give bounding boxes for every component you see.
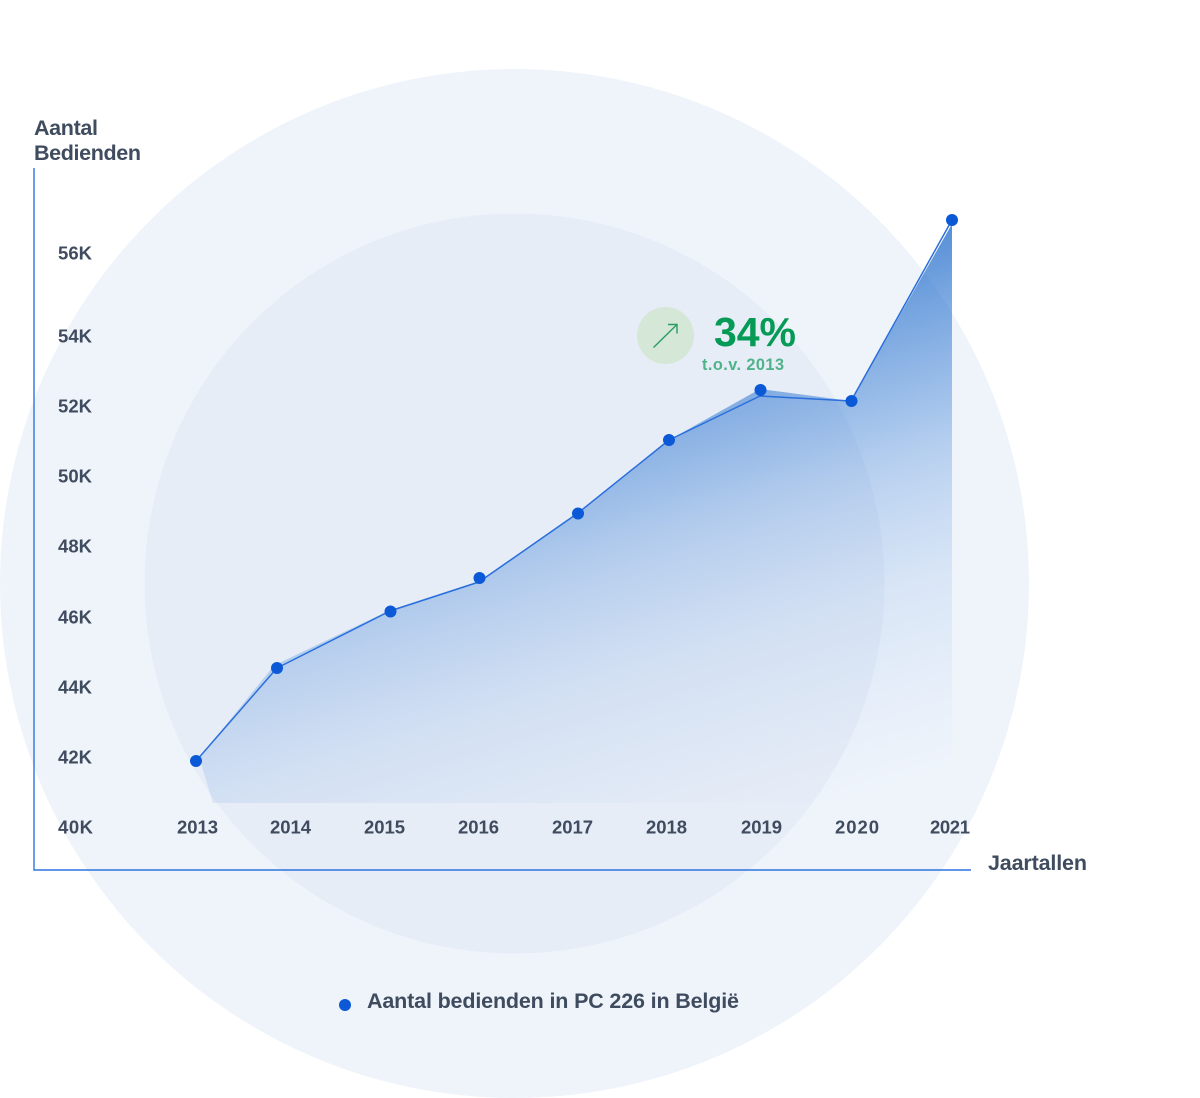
data line (196, 220, 952, 761)
y axis labels: 52K (58, 396, 93, 416)
y axis title: Aantal (34, 116, 98, 140)
y axis labels (58, 242, 94, 838)
y axis labels: 46K (58, 606, 93, 628)
legend (339, 989, 739, 1013)
x axis labels: 2016 (458, 816, 499, 838)
x axis labels: 2021 (930, 816, 970, 838)
y axis title: Bedienden (34, 141, 141, 165)
inner background circle (144, 214, 884, 954)
y axis labels: 56K (58, 242, 93, 264)
area under the line (200, 224, 952, 803)
y axis labels: 48K (58, 536, 93, 556)
x axis labels: 2013 (177, 816, 218, 838)
growth callout (637, 307, 796, 374)
x axis labels (177, 816, 970, 838)
legend label: Aantal bedienden in PC 226 in België (367, 989, 739, 1013)
y axis and x axis (34, 168, 971, 870)
legend marker (339, 999, 351, 1011)
growth note: t.o.v. 2013 (702, 356, 784, 374)
x axis labels: 2017 (552, 816, 593, 838)
x axis labels: 2018 (646, 816, 687, 838)
data points (190, 214, 958, 767)
x axis labels: 2015 (364, 816, 405, 838)
y axis labels: 42K (58, 746, 93, 768)
y axis labels: 40K (58, 816, 94, 838)
x axis labels: 2019 (741, 816, 782, 838)
y axis title (34, 116, 141, 165)
x axis labels: 2014 (270, 816, 312, 838)
y axis labels: 50K (58, 466, 93, 486)
icon: green circle with up arrow (637, 307, 694, 364)
growth percentage: 34% (714, 309, 796, 355)
x axis title: Jaartallen (988, 851, 1087, 875)
y axis labels: 54K (58, 326, 93, 346)
y axis labels: 44K (58, 676, 93, 698)
x axis labels: 2020 (835, 816, 879, 838)
